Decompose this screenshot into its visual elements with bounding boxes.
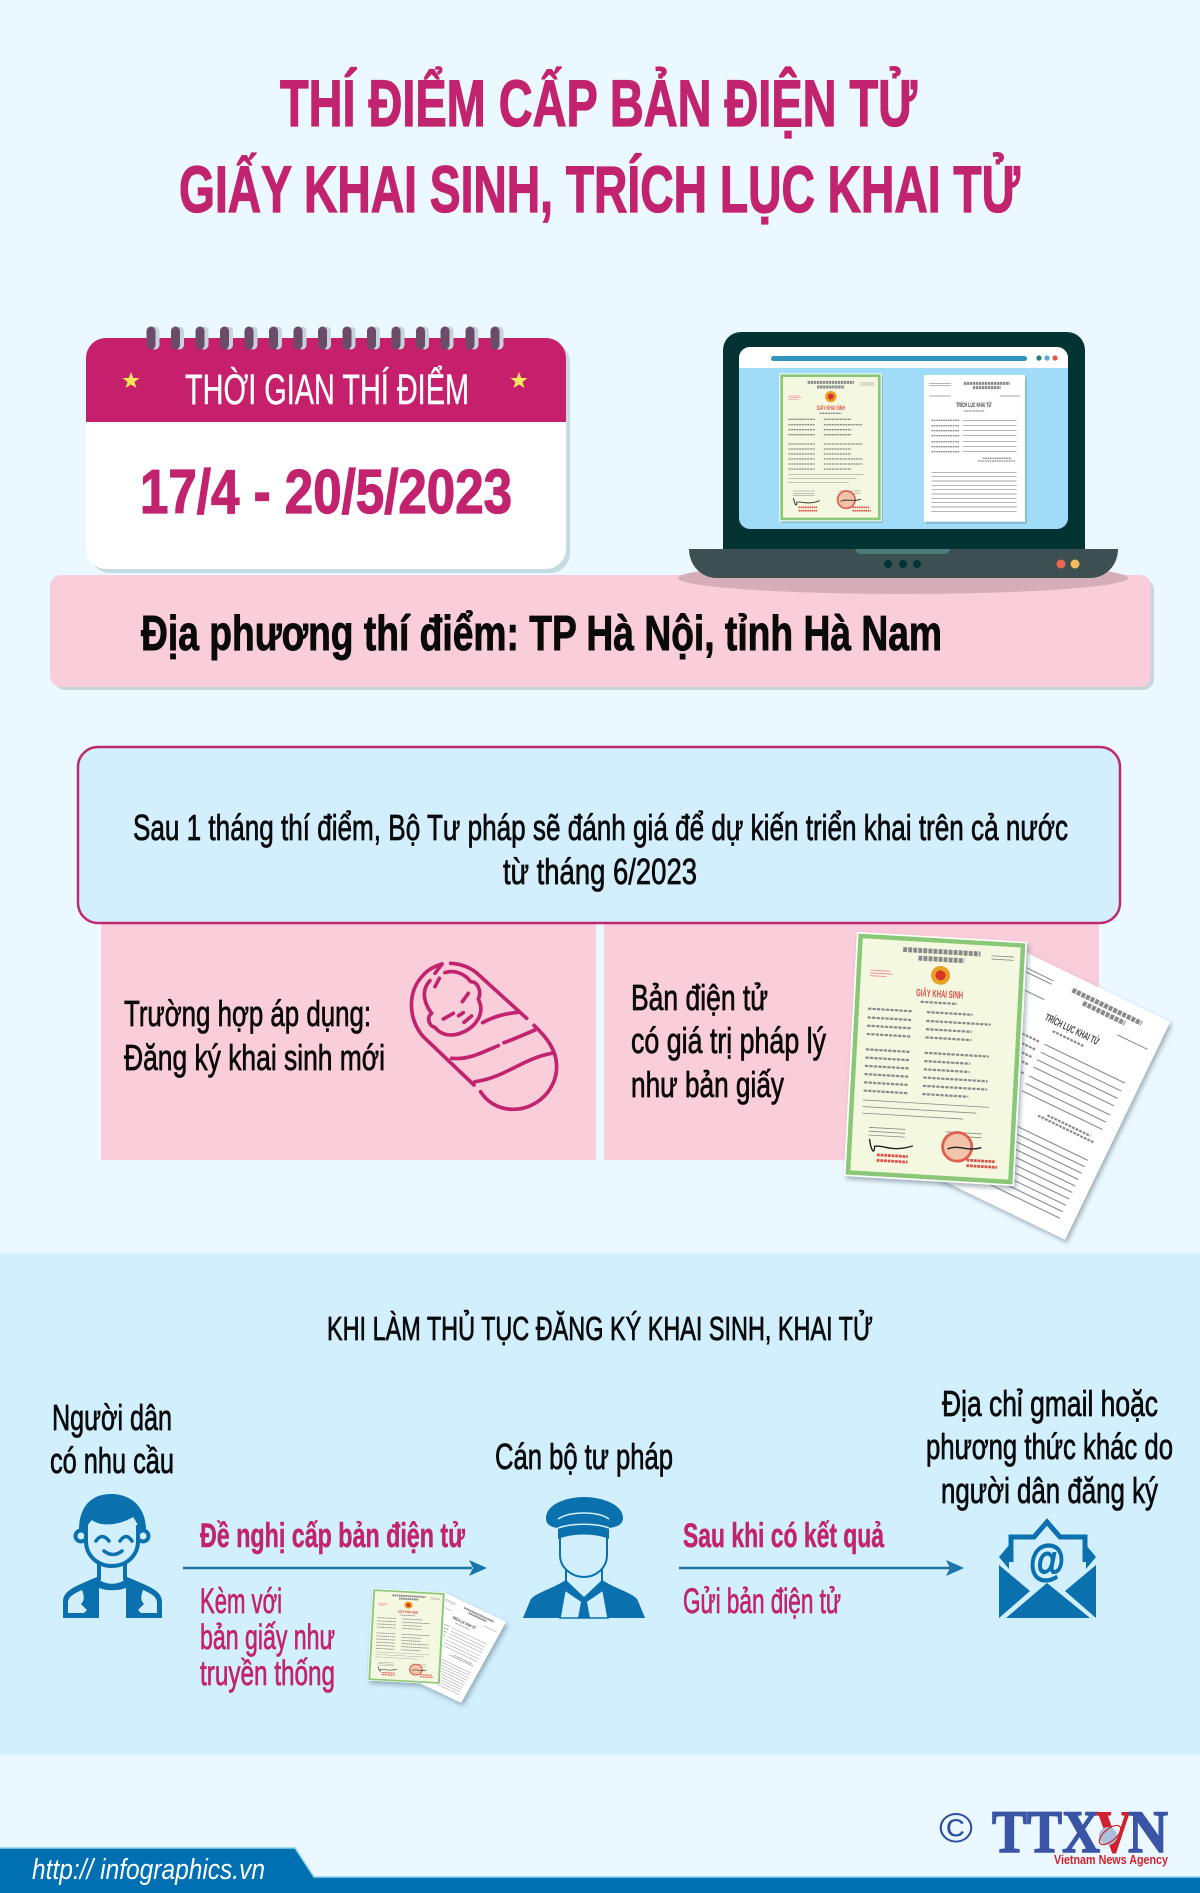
panel: case of application: Đăng ký khai sinh mới	[124, 1037, 385, 1078]
panel: calendar with pilot period: 17/4 - 20/5/2023	[140, 458, 512, 527]
icon: justice officer	[523, 1497, 645, 1618]
panel: legal value: Bản điện tử	[631, 977, 768, 1018]
logo: TTXVN: Vietnam News Agency	[1054, 1852, 1169, 1867]
icon: death extract paper	[914, 949, 1170, 1240]
request label: Đề nghị cấp bản điện tử	[200, 1517, 465, 1555]
panel: procedure band: KHI LÀM THỦ TỤC ĐĂNG KÝ KHAI SINH, KHAI TỬ	[327, 1310, 873, 1347]
panel: pilot localities: Địa phương thí điểm: TP Hà Nội, tỉnh Hà Nam	[141, 607, 942, 661]
icon: citizen	[63, 1494, 162, 1618]
panel: case of application	[101, 924, 596, 1160]
logo: TTXVN: N	[1128, 1799, 1168, 1865]
panel: calendar with pilot period	[86, 331, 570, 573]
panel: calendar with pilot period: THỜI GIAN THÍ ĐIỂM	[185, 365, 469, 414]
attachment note: truyền thống	[200, 1654, 335, 1693]
attachment note: bản giấy như	[200, 1618, 335, 1657]
citizen label	[50, 1397, 174, 1481]
citizen label: có nhu cầu	[50, 1440, 174, 1481]
icon: birth certificate	[844, 932, 1027, 1186]
panel: legal value	[604, 924, 1099, 1160]
result label: Sau khi có kết quả	[683, 1517, 885, 1555]
logo: TTXVN: TTX	[992, 1799, 1100, 1865]
footer bar with site link: http:// infographics.vn	[32, 1854, 265, 1886]
icon: swaddled baby	[411, 963, 557, 1109]
icon: laptop with documents	[678, 332, 1128, 594]
logo: TTXVN: V	[1096, 1799, 1132, 1865]
panel: pilot localities	[50, 575, 1154, 690]
title: THÍ ĐIỂM CẤP BẢN ĐIỆN TỬ	[280, 66, 917, 140]
title	[179, 66, 1020, 226]
arrow: result	[679, 1560, 964, 1576]
attachment note	[200, 1582, 335, 1693]
icon: email envelope: @	[1029, 1536, 1065, 1585]
panel: evaluation note	[78, 747, 1120, 923]
panel: legal value: có giá trị pháp lý	[631, 1020, 826, 1061]
logo: TTXVN: ©	[939, 1804, 973, 1851]
panel: evaluation note: từ tháng 6/2023	[503, 851, 697, 892]
panel: procedure band	[0, 1253, 1200, 1755]
panel: legal value: như bản giấy	[631, 1064, 784, 1105]
footer bar with site link	[0, 1848, 1200, 1893]
attachment note: Kèm với	[200, 1582, 282, 1621]
citizen label: Người dân	[52, 1397, 172, 1438]
icon: email envelope	[999, 1522, 1096, 1618]
officer label: Cán bộ tư pháp	[495, 1436, 673, 1477]
recipient label	[926, 1383, 1173, 1511]
icon: small paper documents	[367, 1589, 506, 1703]
logo: TTXVN	[939, 1799, 1169, 1867]
arrow: request	[183, 1560, 487, 1576]
panel: case of application: Trường hợp áp dụng:	[124, 993, 371, 1034]
send note: Gửi bản điện tử	[683, 1582, 841, 1621]
